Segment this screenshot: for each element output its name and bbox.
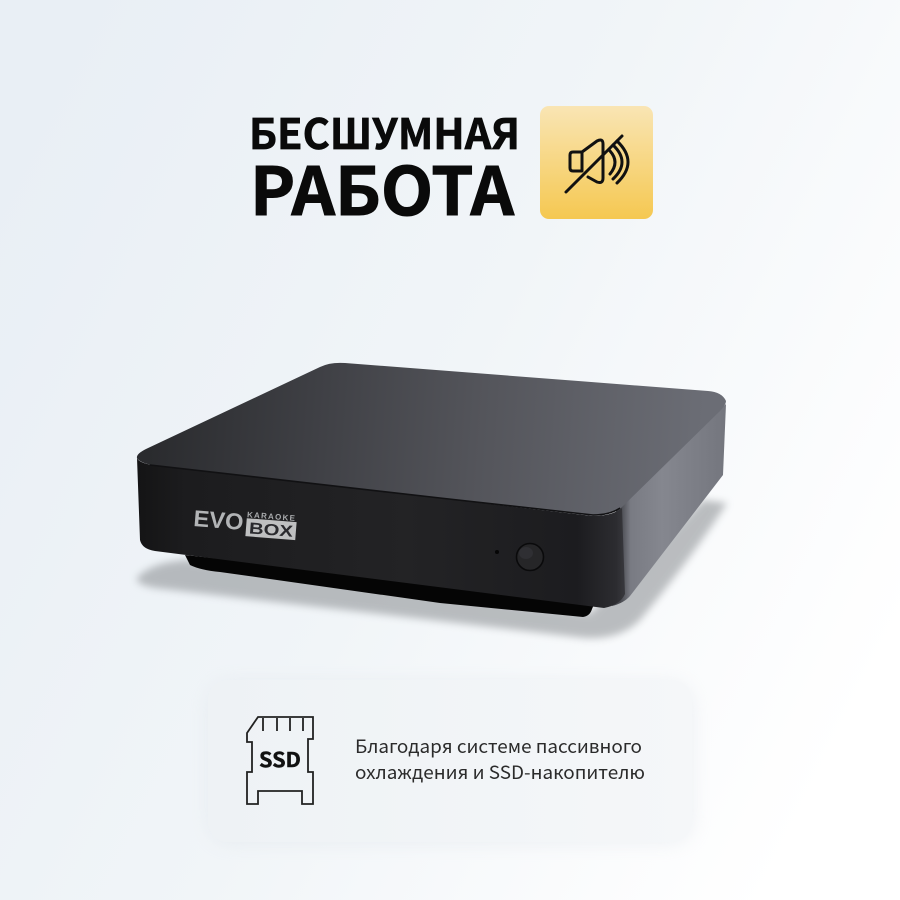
product: EVOBOX karaoke device xyxy=(137,363,727,638)
description line 2: охлаждения и SSD-накопителю xyxy=(355,759,645,785)
icon label: SSD xyxy=(259,744,301,773)
device front face xyxy=(137,458,625,608)
device right side xyxy=(612,404,726,606)
device shadow xyxy=(137,500,727,638)
logo BOX plate: BOX xyxy=(248,520,294,541)
top face dark front edge xyxy=(150,465,620,515)
icon: muted speaker on gold tile xyxy=(540,106,653,219)
logo small word: KARAOKE xyxy=(247,510,296,523)
panel description xyxy=(355,733,645,785)
logo word EVO: EVO xyxy=(193,505,244,535)
title line 2: РАБОТА xyxy=(250,139,515,235)
device top face xyxy=(137,363,726,516)
power button xyxy=(516,544,544,570)
icon: SSD card xyxy=(247,717,313,804)
panel shadow xyxy=(210,684,692,842)
description line 1: Благодаря системе пассивного xyxy=(355,733,642,759)
LED indicator xyxy=(495,550,499,554)
panel: SSD note xyxy=(208,680,692,842)
device feet xyxy=(185,555,596,617)
title line 1: БЕСШУМНАЯ xyxy=(249,101,520,162)
panel body xyxy=(208,680,692,842)
logo xyxy=(192,505,297,541)
title xyxy=(249,101,520,235)
